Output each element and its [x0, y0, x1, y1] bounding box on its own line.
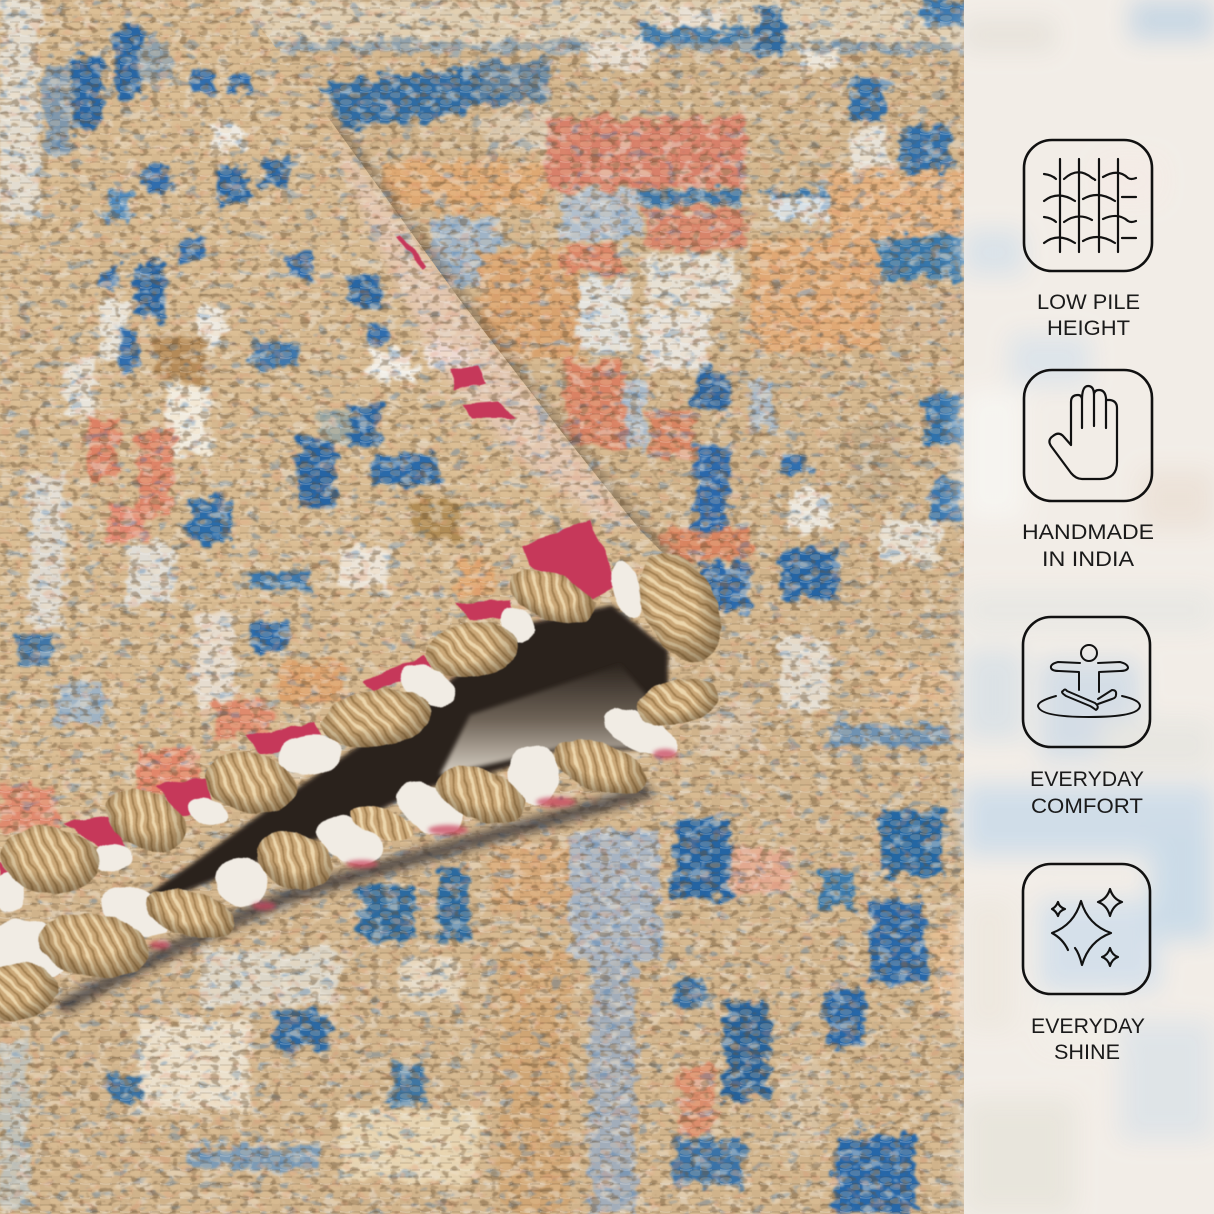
- pink roll shoulder: [330, 130, 640, 530]
- feature: low pile height: [1024, 140, 1152, 340]
- rug floor colour patches: [0, 0, 964, 1214]
- label: low pile height: LOW PILE: [1037, 291, 1140, 314]
- icon: hand: [1024, 370, 1152, 501]
- label: everyday shine: [1031, 1015, 1145, 1064]
- label: low pile height: HEIGHT: [1047, 317, 1130, 340]
- rolled rug body: [0, 0, 662, 835]
- panel: features sidebar: [964, 0, 1214, 1214]
- label: everyday shine: EVERYDAY: [1031, 1015, 1145, 1038]
- shadow cast along the roll edge: [330, 120, 710, 600]
- white chenille loops: [0, 558, 684, 990]
- cavity shadow under the roll: [60, 605, 668, 1008]
- crimson edge accents: [0, 236, 618, 890]
- jute rope edge: [0, 539, 737, 1027]
- feature: handmade in India: [1022, 370, 1154, 571]
- label: everyday shine: SHINE: [1054, 1041, 1120, 1064]
- icon: woven pile: [1024, 140, 1152, 271]
- stitch texture: [0, 0, 964, 1214]
- label: low pile height: [1037, 291, 1140, 340]
- feature: everyday shine: [1023, 864, 1150, 1064]
- icon: sparkles: [1023, 864, 1150, 994]
- label: handmade in India: HANDMADE: [1022, 521, 1154, 544]
- label: everyday comfort: EVERYDAY: [1030, 768, 1144, 791]
- icon: seated meditation: [1023, 617, 1150, 747]
- label: handmade in India: [1022, 521, 1154, 571]
- label: everyday comfort: [1030, 768, 1144, 818]
- pink tips: [150, 749, 677, 949]
- label: handmade in India: IN INDIA: [1042, 548, 1134, 571]
- stitch speckle layers: [0, 0, 964, 1214]
- label: everyday comfort: COMFORT: [1031, 795, 1143, 818]
- panel background: faded rug: [964, 0, 1214, 1214]
- photo: rolled woven rug: [0, 0, 964, 1214]
- feature: everyday comfort: [1023, 617, 1150, 818]
